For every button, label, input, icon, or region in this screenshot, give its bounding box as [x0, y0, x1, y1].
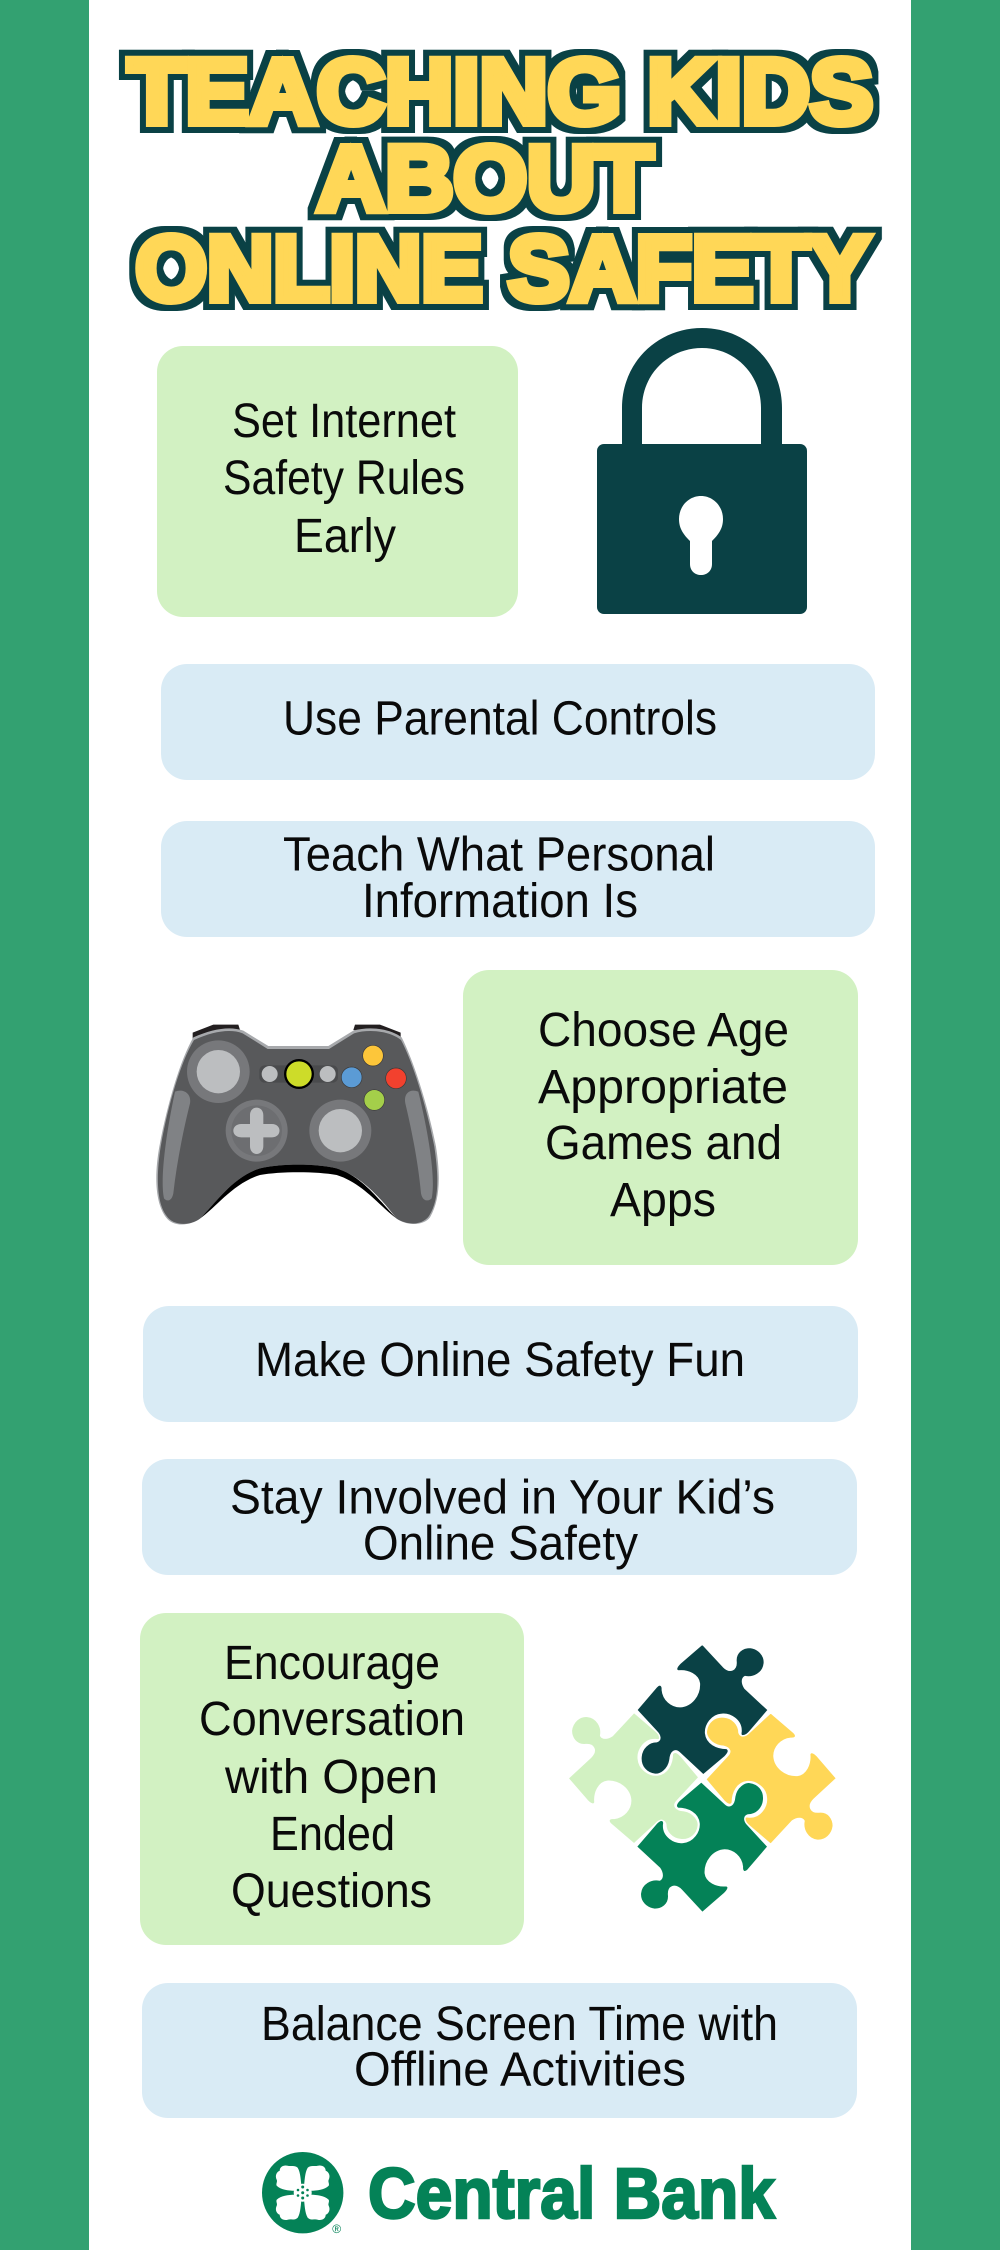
panel: encourage conversation with open ended questions: Questions	[231, 1865, 432, 1918]
icon: padlock	[597, 328, 807, 614]
panel: stay involved in your kid's online safety	[142, 1459, 857, 1575]
panel: set internet safety rules early: Safety Rules	[223, 452, 465, 505]
panel: encourage conversation with open ended questions: with Open	[224, 1751, 438, 1804]
panel: choose age appropriate games and apps: Apps	[610, 1174, 716, 1227]
panel: set internet safety rules early: Set Internet	[232, 395, 456, 448]
title: TEACHING KIDS	[128, 41, 873, 143]
title: ABOUT	[317, 128, 653, 230]
panel: choose age appropriate games and apps	[463, 970, 858, 1265]
controller bottom shadow	[200, 1165, 397, 1219]
panel: choose age appropriate games and apps: Choose Age	[538, 1004, 789, 1057]
right green side bar	[911, 0, 1000, 2250]
panel: use parental controls	[161, 664, 875, 780]
panel: teach what personal information is	[161, 821, 875, 937]
panel: make online safety fun	[143, 1306, 858, 1422]
title	[128, 41, 873, 320]
title: ONLINE SAFETY	[136, 218, 870, 320]
logo: central bank: Central Bank	[368, 2155, 775, 2234]
panel: balance screen time with offline activities	[142, 1983, 857, 2118]
panel: choose age appropriate games and apps: Games and	[545, 1117, 782, 1170]
icon: game controller	[156, 1025, 439, 1224]
panel: set internet safety rules early: Early	[294, 510, 396, 563]
logo: central bank: ®	[332, 2222, 341, 2236]
left green side bar	[0, 0, 89, 2250]
panel: use parental controls: Use Parental Controls	[283, 692, 717, 746]
panel: encourage conversation with open ended questions	[140, 1613, 524, 1945]
panel: choose age appropriate games and apps: Appropriate	[538, 1061, 788, 1114]
panel: balance screen time with offline activities: Balance Screen Time with	[261, 1998, 778, 2051]
panel: teach what personal information is: Teach What Personal	[283, 828, 715, 882]
panel: balance screen time with offline activities: Offline Activities	[354, 2044, 686, 2096]
icon: puzzle pieces	[568, 1644, 837, 1913]
panel: encourage conversation with open ended questions: Encourage	[224, 1637, 440, 1690]
panel: encourage conversation with open ended questions: Ended	[270, 1808, 395, 1861]
panel: teach what personal information is: Information Is	[362, 875, 638, 928]
panel: make online safety fun: Make Online Safety Fun	[255, 1334, 745, 1387]
panel: encourage conversation with open ended questions: Conversation	[199, 1693, 465, 1746]
panel: stay involved in your kid's online safety: Stay Involved in Your Kid’s	[230, 1472, 775, 1524]
panel: set internet safety rules early	[157, 346, 518, 617]
panel: stay involved in your kid's online safety: Online Safety	[363, 1518, 638, 1570]
